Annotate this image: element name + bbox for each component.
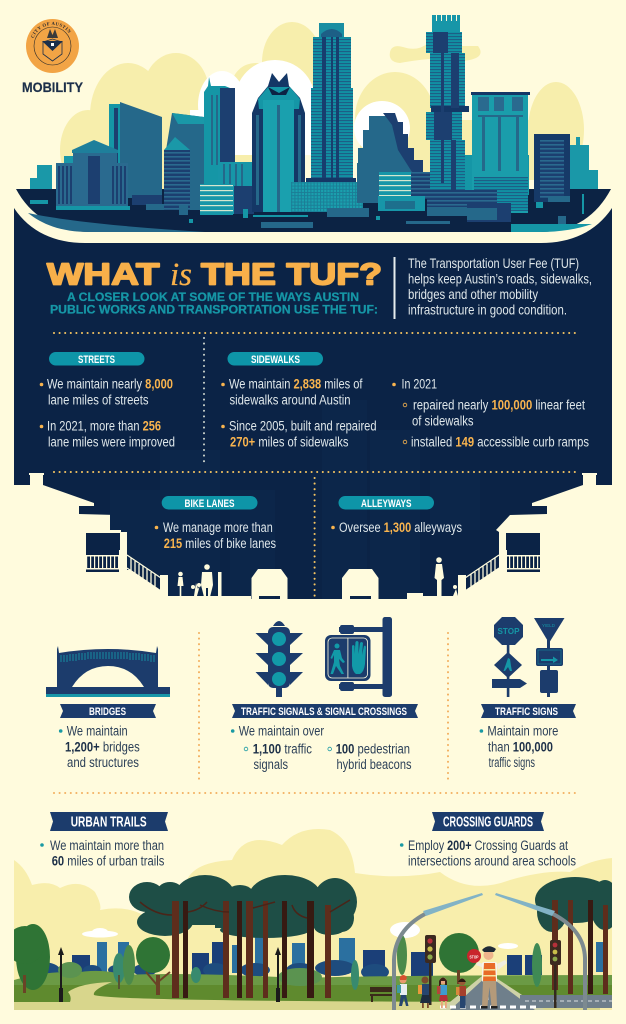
right teal office bbox=[465, 92, 530, 213]
panel: bike lanes bbox=[155, 496, 276, 551]
banner: traffic signs: TRAFFIC SIGNS bbox=[495, 706, 558, 718]
streets bullets: We maintain nearly 8,000 bbox=[47, 376, 173, 392]
urban trails text: We maintain more than bbox=[50, 838, 164, 853]
streets bullets: lane miles were improved bbox=[48, 434, 175, 450]
streets bullets: In 2021, more than 256 bbox=[47, 418, 161, 434]
schoolchildren bbox=[397, 975, 466, 1008]
right tree canopy bbox=[535, 877, 620, 932]
subtitle bbox=[50, 292, 378, 316]
city skyline illustration bbox=[16, 15, 611, 232]
icon: traffic light bbox=[256, 621, 303, 697]
sidewalks bullets: 270+ miles of sidewalks bbox=[230, 434, 349, 450]
slanted roof building bbox=[164, 113, 204, 210]
stepped pyramid building bbox=[357, 113, 433, 211]
bridges text: and structures bbox=[67, 755, 139, 770]
title bbox=[47, 256, 382, 293]
spire building bbox=[204, 77, 235, 190]
frost tower bbox=[252, 73, 305, 212]
sidewalks bullets: sidewalks around Austin bbox=[230, 392, 350, 408]
panel: alleyways bbox=[331, 496, 462, 535]
left house porch bbox=[85, 530, 251, 599]
traffic signals text: 1,100 traffic bbox=[253, 742, 312, 756]
white clouds bbox=[190, 60, 410, 155]
intro paragraph bbox=[408, 255, 592, 318]
park lamps bbox=[58, 947, 281, 1002]
banner: urban trails bbox=[50, 812, 168, 831]
intro paragraph: The Transportation User Fee (TUF) bbox=[408, 255, 579, 271]
sidewalks bullets: of sidewalks bbox=[412, 414, 474, 428]
footpath bbox=[14, 982, 600, 1011]
traffic lights bbox=[425, 935, 561, 1008]
foreground low blocks bbox=[30, 190, 584, 228]
title: WHAT bbox=[47, 256, 160, 292]
green trees bbox=[6, 924, 542, 995]
traffic signals text: We maintain over bbox=[239, 724, 324, 738]
tree trunks bbox=[172, 901, 331, 998]
icon: bridge bbox=[46, 646, 170, 697]
intro paragraph: bridges and other mobility bbox=[408, 286, 538, 302]
urban trails text: 60 miles of urban trails bbox=[52, 854, 165, 868]
dark right building bbox=[534, 134, 598, 202]
banner: crossing guards: CROSSING GUARDS bbox=[443, 815, 533, 831]
bike lanes bullet bbox=[155, 520, 276, 551]
pill: sidewalks: SIDEWALKS bbox=[251, 354, 300, 366]
banner: traffic signals bbox=[232, 704, 418, 718]
clouds behind skyline bbox=[60, 22, 584, 190]
right car bbox=[342, 569, 378, 599]
bush line bbox=[48, 960, 389, 976]
title: THE TUF? bbox=[201, 256, 382, 292]
city seal logo: CITY OF AUSTIN bbox=[31, 22, 72, 38]
pill: streets: STREETS bbox=[78, 354, 115, 366]
sidewalks bullets: repaired nearly 100,000 linear feet bbox=[413, 398, 585, 412]
big tree canopy bbox=[129, 875, 357, 938]
base lens bbox=[16, 189, 611, 232]
Austonian tall tower bbox=[426, 15, 469, 190]
banner: bridges: BRIDGES bbox=[89, 706, 126, 718]
traffic signs text: Maintain more bbox=[487, 724, 558, 738]
pill: sidewalks bbox=[228, 352, 323, 366]
bridges text bbox=[59, 724, 140, 770]
traffic signs text bbox=[480, 724, 558, 770]
park and school crossing scene bbox=[6, 829, 620, 1011]
traffic signals text bbox=[231, 724, 412, 772]
street lights bbox=[394, 914, 585, 1010]
office tower left bbox=[109, 102, 162, 198]
panel: main navy panel bbox=[14, 208, 612, 599]
banner: bridges bbox=[60, 704, 156, 718]
streets bullets: lane miles of streets bbox=[48, 392, 149, 408]
small white clouds bbox=[82, 922, 518, 949]
360 tower bbox=[291, 23, 363, 212]
bench bbox=[370, 987, 393, 1002]
pill: bike lanes: BIKE LANES bbox=[184, 498, 234, 510]
capitol building bbox=[56, 140, 168, 210]
bike lanes bullet: 215 miles of bike lanes bbox=[164, 536, 276, 551]
subtitle: PUBLIC WORKS AND TRANSPORTATION USE THE TUF: bbox=[50, 304, 378, 316]
panel: sidewalks bbox=[221, 352, 589, 450]
sidewalks bullets bbox=[221, 376, 589, 450]
banner: crossing guards bbox=[432, 812, 544, 831]
divider bbox=[394, 257, 396, 319]
crossing guards text bbox=[400, 838, 576, 868]
icon: pedestrian signal bbox=[325, 617, 392, 697]
sidewalks bullets: We maintain 2,838 miles of bbox=[229, 376, 363, 392]
road bbox=[440, 976, 612, 1010]
panel: streets bbox=[40, 352, 175, 450]
hedge and grass bbox=[14, 962, 620, 1004]
pill: alleyways: ALLEYWAYS bbox=[361, 498, 412, 510]
heading: mobility: MOBILITY bbox=[22, 79, 84, 95]
icon: traffic signs: YIELD bbox=[542, 623, 556, 628]
low teal strip building bbox=[200, 162, 254, 215]
traffic signs text: traffic signs bbox=[489, 755, 535, 770]
crossing guard: STOP bbox=[470, 954, 478, 960]
left street silhouettes bbox=[178, 564, 288, 599]
bridges text: We maintain bbox=[67, 724, 128, 738]
left background blocks bbox=[30, 165, 52, 189]
crossing guards text: intersections around area schools bbox=[408, 854, 576, 868]
crossing guard bbox=[467, 946, 507, 1008]
right house porch bbox=[407, 530, 541, 599]
sidewalks bullets: In 2021 bbox=[402, 376, 437, 392]
subtitle: A CLOSER LOOK AT SOME OF THE WAYS AUSTIN bbox=[67, 292, 359, 304]
sidewalks bullets: installed 149 accessible curb ramps bbox=[411, 434, 589, 450]
chimneys bbox=[29, 473, 597, 485]
faint skyline inside panel bbox=[110, 400, 480, 599]
banner: urban trails: URBAN TRAILS bbox=[71, 815, 147, 831]
banner: traffic signals: TRAFFIC SIGNALS & SIGNAL CROSSINGS bbox=[241, 706, 407, 718]
icon: traffic signs: STOP bbox=[498, 626, 520, 636]
scene clouds bbox=[14, 829, 612, 1010]
alleyways bullet: Oversee 1,300 alleyways bbox=[339, 520, 462, 535]
intro paragraph: infrastructure in good condition. bbox=[408, 302, 567, 318]
bike lanes bullet: We manage more than bbox=[163, 520, 273, 535]
city seal logo bbox=[26, 19, 79, 73]
icon: traffic signs bbox=[492, 617, 564, 697]
urban trails text bbox=[40, 838, 165, 868]
crossing guards text: Employ 200+ Crossing Guards at bbox=[408, 838, 568, 853]
streets bullets bbox=[40, 376, 175, 450]
left car bbox=[252, 569, 288, 599]
traffic signs text: than 100,000 bbox=[488, 740, 553, 754]
traffic signals text: signals bbox=[254, 757, 288, 772]
distant city buildings bbox=[72, 942, 542, 977]
right street silhouettes bbox=[342, 557, 463, 599]
title: is bbox=[170, 257, 192, 293]
bridges text: 1,200+ bridges bbox=[65, 740, 140, 754]
traffic signals text: 100 pedestrian bbox=[336, 742, 410, 756]
sidewalks bullets: Since 2005, built and repaired bbox=[229, 418, 376, 434]
traffic signals text: hybrid beacons bbox=[336, 757, 412, 772]
